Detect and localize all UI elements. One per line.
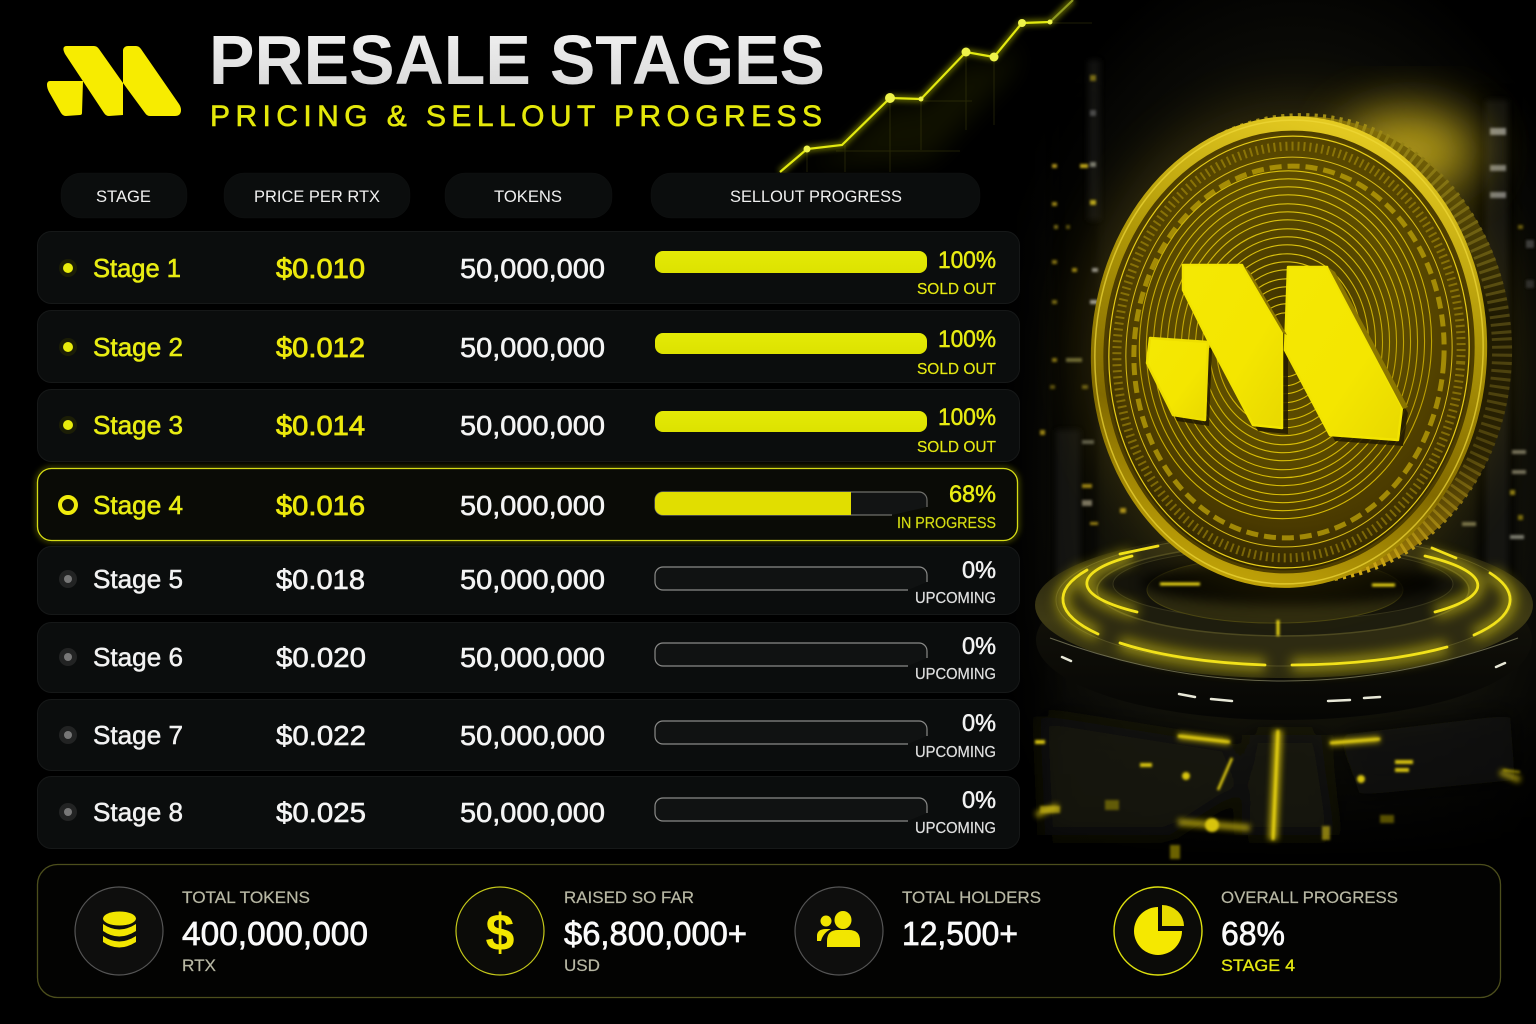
- row: stage 6: [38, 622, 1020, 692]
- row: stage 6: $0.020: [276, 642, 366, 673]
- stat: overall progress: 68%: [1221, 915, 1285, 952]
- title: PRESALE STAGES: [209, 21, 825, 99]
- table header: SELLOUT PROGRESS: [730, 187, 902, 206]
- stat: overall progress: OVERALL PROGRESS: [1221, 888, 1398, 907]
- row: stage 8: 0%: [962, 787, 996, 814]
- row: stage 6: UPCOMING: [915, 666, 996, 683]
- scene: futuristic city backdrop: [1000, 0, 1536, 860]
- stat: overall progress: STAGE 4: [1221, 956, 1295, 975]
- table header: [61, 173, 980, 218]
- row: stage 5: 50,000,000: [460, 564, 605, 595]
- row: stage 8: Stage 8: [93, 797, 183, 827]
- row: stage 1: Stage 1: [93, 253, 181, 283]
- row: stage 2: SOLD OUT: [917, 361, 996, 378]
- row: stage 2: Stage 2: [93, 332, 183, 362]
- row: stage 6: 50,000,000: [460, 642, 605, 673]
- stat: total holders: TOTAL HOLDERS: [902, 888, 1041, 907]
- stat: raised so far: [456, 887, 747, 975]
- stat: raised so far: $: [486, 904, 515, 962]
- row: stage 8: $0.025: [276, 797, 366, 828]
- row: stage 3: [38, 390, 1020, 462]
- stat: overall progress: [1114, 887, 1398, 975]
- row: stage 2: 100%: [938, 326, 996, 353]
- row: stage 8: 50,000,000: [460, 797, 605, 828]
- row: stage 5: [38, 546, 1020, 614]
- row: stage 7: $0.022: [276, 720, 366, 751]
- row: stage 3: SOLD OUT: [917, 439, 996, 456]
- row: stage 4 current: 68%: [949, 481, 996, 508]
- row: stage 3: Stage 3: [93, 410, 183, 440]
- row: stage 7: UPCOMING: [915, 744, 996, 761]
- row: stage 6: 0%: [962, 633, 996, 660]
- row: stage 1: SOLD OUT: [917, 281, 996, 298]
- table header: TOKENS: [494, 187, 562, 206]
- coin: gold RTX token: [1077, 100, 1524, 600]
- table header: PRICE PER RTX: [254, 187, 380, 206]
- line chart: rising price trend: [780, 0, 1092, 172]
- platform: glowing pedestal under the coin: [1035, 532, 1533, 720]
- stat: raised so far: $6,800,000+: [564, 915, 747, 952]
- coin edge: [1086, 105, 1524, 591]
- row: stage 1: 100%: [938, 247, 996, 274]
- stat: total holders: [795, 887, 1041, 975]
- row: stage 3: 100%: [938, 404, 996, 431]
- row: stage 1: $0.010: [276, 253, 365, 284]
- coin logo: [1147, 265, 1408, 446]
- row: stage 4 current: 50,000,000: [460, 490, 605, 521]
- stat: total tokens: [75, 887, 368, 975]
- subtitle: PRICING & SELLOUT PROGRESS: [210, 100, 822, 133]
- row: stage 4 current: $0.016: [276, 490, 365, 521]
- table header: STAGE: [96, 187, 151, 206]
- row: stage 7: [38, 700, 1020, 770]
- stat: raised so far: USD: [564, 956, 600, 975]
- stat: total tokens: RTX: [182, 956, 216, 975]
- coin face: [1077, 104, 1501, 600]
- row: stage 1: [38, 232, 1020, 304]
- stat: total holders: 12,500+: [902, 915, 1018, 952]
- row: stage 2: 50,000,000: [460, 332, 605, 363]
- row: stage 7: 50,000,000: [460, 720, 605, 751]
- row: stage 7: 0%: [962, 710, 996, 737]
- row: stage 7: Stage 7: [93, 720, 183, 750]
- row: stage 2: $0.012: [276, 332, 365, 363]
- stat: total tokens: TOTAL TOKENS: [182, 888, 310, 907]
- row: stage 4 current: [38, 468, 1018, 540]
- row: stage 5: Stage 5: [93, 564, 183, 594]
- row: stage 3: $0.014: [276, 410, 365, 441]
- logo: [47, 46, 181, 116]
- row: stage 4 current: IN PROGRESS: [897, 515, 996, 532]
- floor: dark circuit panels with glowing traces: [1035, 715, 1520, 859]
- summary panel: [38, 864, 1500, 998]
- row: stage 5: $0.018: [276, 564, 365, 595]
- stat: total tokens: 400,000,000: [182, 915, 368, 952]
- row: stage 3: 50,000,000: [460, 410, 605, 441]
- row: stage 5: UPCOMING: [915, 590, 996, 607]
- row: stage 5: 0%: [962, 557, 996, 584]
- row: stage 4 current: Stage 4: [93, 490, 183, 520]
- row: stage 8: UPCOMING: [915, 820, 996, 837]
- row: stage 8: [38, 776, 1020, 848]
- stat: raised so far: RAISED SO FAR: [564, 888, 694, 907]
- row: stage 2: [38, 310, 1020, 382]
- row: stage 6: Stage 6: [93, 642, 183, 672]
- row: stage 1: 50,000,000: [460, 253, 605, 284]
